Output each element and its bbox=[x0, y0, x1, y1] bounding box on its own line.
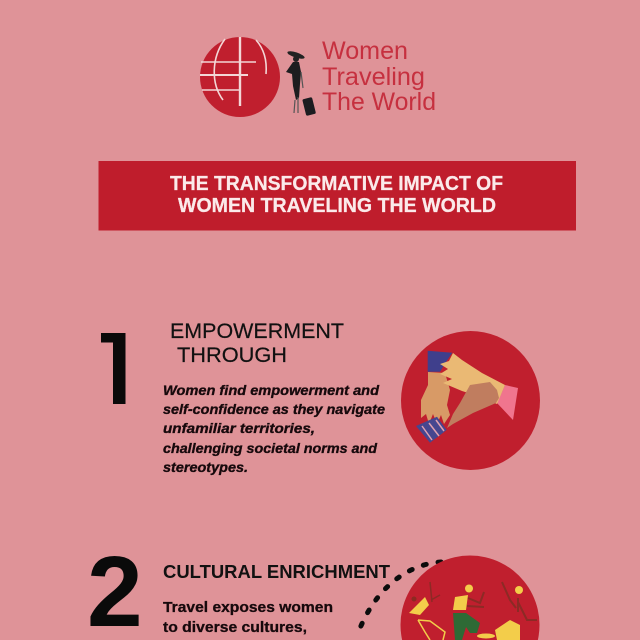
heading: THROUGH bbox=[177, 343, 287, 367]
logo wordmark: Women bbox=[322, 37, 408, 65]
icon: globe bbox=[200, 37, 280, 117]
body text: self-confidence as they navigate bbox=[163, 401, 385, 417]
title bbox=[170, 172, 503, 217]
title banner bbox=[98, 161, 576, 230]
body text: stereotypes. bbox=[163, 459, 248, 475]
section 1: empowerment bbox=[96, 310, 540, 475]
section 2: cultural enrichment bbox=[87, 550, 540, 640]
logo wordmark bbox=[322, 37, 436, 116]
body text bbox=[163, 600, 333, 636]
body text: challenging societal norms and bbox=[163, 440, 377, 456]
logo wordmark: The World bbox=[322, 88, 436, 116]
icon: dancers bbox=[400, 555, 540, 640]
title: WOMEN TRAVELING THE WORLD bbox=[178, 194, 496, 217]
title: THE TRANSFORMATIVE IMPACT OF bbox=[170, 172, 503, 195]
icon: joined hands bbox=[401, 331, 540, 470]
heading: CULTURAL ENRICHMENT bbox=[163, 562, 390, 582]
body text bbox=[163, 382, 385, 475]
number 1: 1 bbox=[96, 310, 138, 436]
arrow: dotted curve bbox=[357, 562, 441, 636]
number 1 bbox=[101, 333, 126, 404]
body text: to diverse cultures, bbox=[163, 620, 307, 636]
body text: Travel exposes women bbox=[163, 600, 333, 616]
body text: Women find empowerment and bbox=[163, 382, 379, 398]
logo wordmark: Traveling bbox=[322, 63, 425, 91]
heading bbox=[170, 319, 344, 367]
body text: unfamiliar territories, bbox=[163, 420, 315, 436]
heading: EMPOWERMENT bbox=[170, 319, 344, 343]
logo bbox=[200, 37, 436, 117]
icon: woman with suitcase bbox=[286, 50, 316, 116]
